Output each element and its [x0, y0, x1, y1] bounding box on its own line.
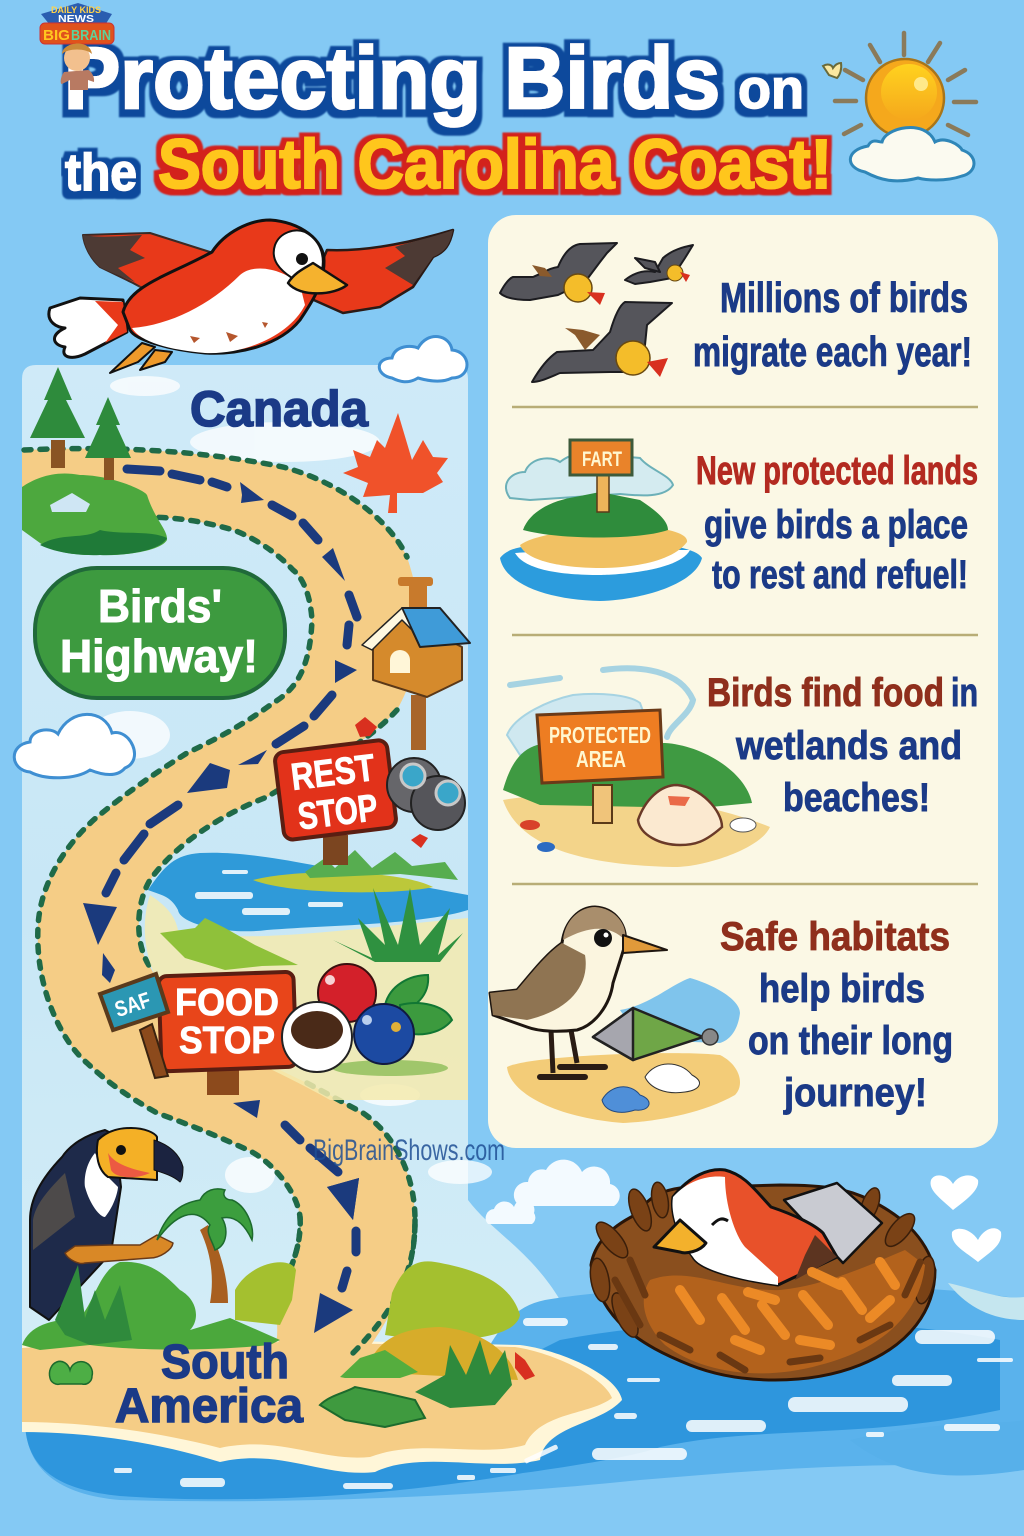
icon: left cloud	[14, 714, 135, 778]
label: South America: South	[161, 1336, 289, 1389]
text: food in wetlands: wetlands and	[735, 724, 962, 768]
item: millions of birds	[500, 243, 972, 382]
icon: pine trees and green hill	[22, 367, 167, 555]
left map panel	[22, 365, 560, 1360]
icon: maple leaf	[343, 413, 448, 513]
island road edges and arrows	[275, 1178, 415, 1353]
label: South America: America	[115, 1380, 303, 1433]
label: Canada: Canada	[190, 381, 369, 437]
icon: protected area sign on beach: AREA	[576, 746, 626, 772]
food stop sign: STOP	[179, 1020, 275, 1062]
icon: sun with cloud	[823, 33, 976, 181]
south america island	[22, 1339, 622, 1473]
icon: island with sign: FART	[582, 448, 622, 471]
icon: hearts	[931, 1175, 1001, 1262]
label: Birds' Highway!	[35, 568, 285, 698]
text: safe habitats: help birds	[759, 967, 925, 1011]
icon: nest with sleeping bird	[587, 1170, 938, 1380]
icon: protected area sign on beach	[503, 668, 770, 867]
migration route arrows	[83, 469, 359, 1220]
rest stop sign	[274, 717, 397, 865]
title: South Carolina Coast!	[158, 125, 832, 203]
icon: cloud above panel	[379, 336, 467, 382]
title: Protecting Birds	[64, 30, 720, 127]
road over island	[270, 1220, 411, 1360]
icon: toucan	[30, 1128, 183, 1320]
rest stop sign: STOP	[296, 787, 380, 839]
sea	[25, 1283, 1024, 1501]
island bushes and grasses	[22, 1261, 535, 1427]
text: millions of birds	[693, 274, 972, 375]
title	[64, 30, 832, 203]
text: food in wetlands: Birds find food	[707, 671, 944, 715]
label: Birds' Highway!: Highway!	[60, 630, 258, 682]
logo: Daily Kids News with Big Brain: BIG	[43, 27, 70, 44]
text: food in wetlands: in	[951, 671, 978, 715]
text: food in wetlands: beaches!	[783, 776, 930, 820]
text: protected lands	[696, 449, 978, 597]
icon: protected area sign on beach: PROTECTED	[549, 722, 651, 748]
safety sign	[100, 974, 168, 1078]
label: South America	[115, 1336, 303, 1433]
logo: Daily Kids News with Big Brain	[40, 3, 114, 44]
panel: benefits	[488, 215, 998, 1148]
logo: Daily Kids News with Big Brain: DAILY KIDS	[51, 5, 101, 15]
text: safe habitats: Safe habitats	[720, 915, 950, 959]
icon: birdhouse	[362, 577, 470, 750]
icon: berries and coconut	[282, 964, 452, 1076]
food stop sign: FOOD	[175, 982, 279, 1024]
logo: Daily Kids News with Big Brain: BRAIN	[71, 27, 111, 44]
text: safe habitats: on their long	[748, 1019, 953, 1063]
sand road with dotted edges	[22, 449, 419, 1353]
text: safe habitats: journey!	[783, 1071, 927, 1115]
label: Birds' Highway!: Birds'	[98, 580, 222, 632]
icon: palm tree	[157, 1189, 253, 1303]
rest stop sign: REST	[289, 747, 377, 799]
text: safe habitats	[720, 915, 953, 1115]
food stop sign	[158, 972, 297, 1095]
icon: island with sign	[500, 440, 702, 601]
icon: binoculars	[387, 758, 465, 848]
logo: Daily Kids News with Big Brain: NEWS	[58, 14, 94, 25]
text: food in wetlands	[707, 671, 978, 820]
logo mascot	[61, 43, 94, 90]
item: safe habitats	[490, 907, 953, 1123]
item: food in wetlands	[503, 668, 978, 867]
sea wave highlights	[114, 1318, 1013, 1489]
panel clouds	[90, 376, 492, 1193]
icon: sandpiper and litter	[490, 907, 740, 1123]
title: on	[738, 57, 804, 120]
title: the	[65, 144, 137, 202]
clouds over sea	[486, 1160, 620, 1224]
scenery: coastal water, beach and grass	[145, 850, 468, 1100]
item: protected lands	[500, 440, 978, 601]
watermark: BigBrainShows.com	[313, 1134, 505, 1167]
safety sign: SAF	[112, 987, 154, 1022]
icon: flock of birds	[500, 243, 693, 382]
top flying red bird	[49, 220, 453, 373]
